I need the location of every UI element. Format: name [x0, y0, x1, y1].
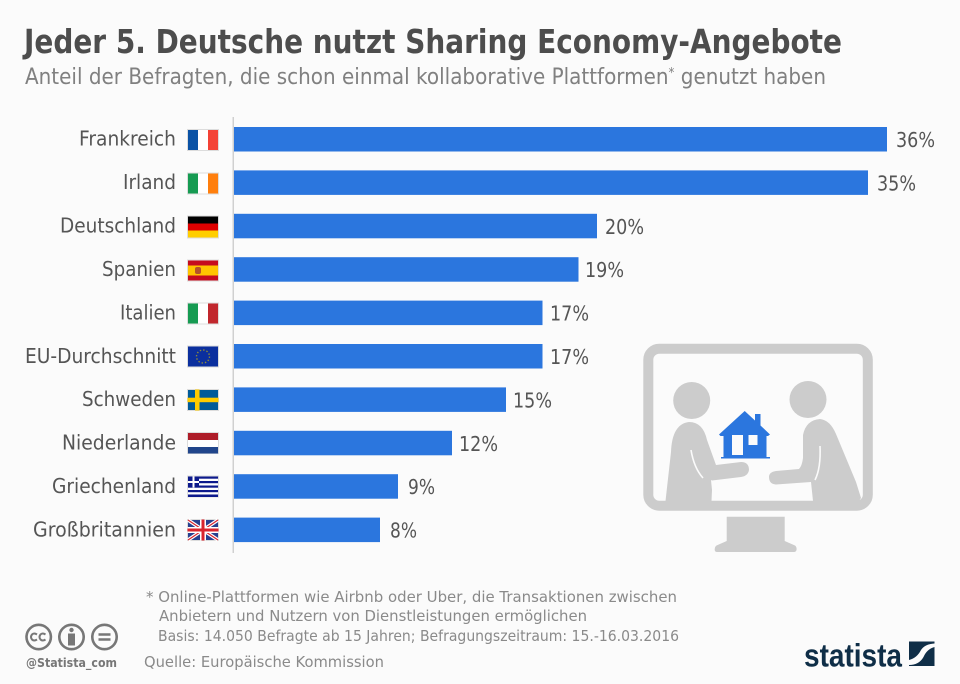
- row: Irland: [123, 170, 916, 195]
- logo mark: [909, 642, 934, 666]
- icon: flag Germany: [188, 216, 218, 238]
- footnote: * Online-Plattformen wie Airbnb oder Uber, die Transaktionen zwischen: [146, 588, 677, 606]
- footnote: Anbietern und Nutzern von Dienstleistungen ermöglichen: [159, 607, 587, 625]
- icon: monitor with two people and house: [648, 349, 868, 552]
- icon: flag Ireland: [188, 173, 218, 194]
- row: Griechenland: Griechenland: [52, 474, 176, 498]
- icon: blue house: [719, 411, 770, 458]
- icon: flag Netherlands: [188, 432, 218, 454]
- monitor frame: [648, 349, 868, 506]
- row: Großbritannien: Großbritannien: [33, 517, 176, 541]
- row: Spanien: Spanien: [102, 257, 176, 281]
- monitor stand: [715, 517, 797, 552]
- bar chart: [25, 117, 935, 553]
- statista logo: statista: [804, 638, 902, 674]
- row: Frankreich: 36%: [896, 128, 935, 152]
- icon: flag EU: [188, 346, 218, 367]
- row: EU-Durchschnitt: 17%: [550, 345, 589, 369]
- row: Großbritannien: [33, 517, 417, 543]
- row: Frankreich: Frankreich: [79, 127, 176, 151]
- row: Schweden: [82, 387, 552, 412]
- subtitle: Anteil der Befragten, die schon einmal kollaborative Plattformen: [25, 65, 734, 90]
- row: EU-Durchschnitt: EU-Durchschnitt: [25, 344, 176, 368]
- row: Italien: [120, 300, 589, 326]
- row: Deutschland: [60, 214, 644, 239]
- source: Quelle: Europäische Kommission: [144, 653, 384, 671]
- row: Deutschland: 20%: [605, 215, 644, 239]
- subtitle: genutzt haben: [674, 65, 826, 90]
- footnote: Basis: 14.050 Befragte ab 15 Jahren; Befragungszeitraum: 15.-16.03.2016: [158, 627, 679, 645]
- icon: creative commons: [26, 625, 117, 649]
- row: Großbritannien: 8%: [390, 519, 417, 543]
- handle: @Statista_com: [26, 655, 117, 671]
- subtitle: *: [669, 66, 675, 81]
- row: Griechenland: [52, 474, 435, 499]
- icon: flag Spain: [188, 260, 218, 281]
- icon: flag France: [188, 130, 218, 150]
- icon: flag Italy: [188, 303, 218, 324]
- row: Griechenland: 9%: [408, 475, 435, 499]
- row: Deutschland: Deutschland: [60, 214, 176, 238]
- person right arm gap: [815, 446, 820, 480]
- row: Niederlande: [62, 431, 498, 456]
- row: Irland: 35%: [877, 171, 916, 195]
- row: Irland: Irland: [123, 170, 176, 194]
- icon: flag Sweden: [188, 390, 218, 410]
- row: Schweden: Schweden: [82, 387, 176, 411]
- person left: [666, 382, 749, 501]
- row: Niederlande: Niederlande: [62, 431, 176, 455]
- row: Spanien: [102, 257, 624, 282]
- axis line: [232, 117, 234, 553]
- row: Niederlande: 12%: [459, 432, 498, 456]
- row: Italien: 17%: [550, 302, 589, 326]
- person right: [769, 381, 861, 501]
- row: Spanien: 19%: [585, 258, 624, 282]
- row: EU-Durchschnitt: [25, 344, 589, 369]
- row: Schweden: 15%: [513, 388, 552, 412]
- row: Frankreich: [79, 127, 935, 152]
- person left arm gap: [691, 450, 703, 478]
- footnote: [146, 588, 679, 645]
- icon: flag UK: [188, 520, 218, 540]
- icon: flag Greece: [188, 476, 218, 497]
- row: Italien: Italien: [120, 300, 176, 324]
